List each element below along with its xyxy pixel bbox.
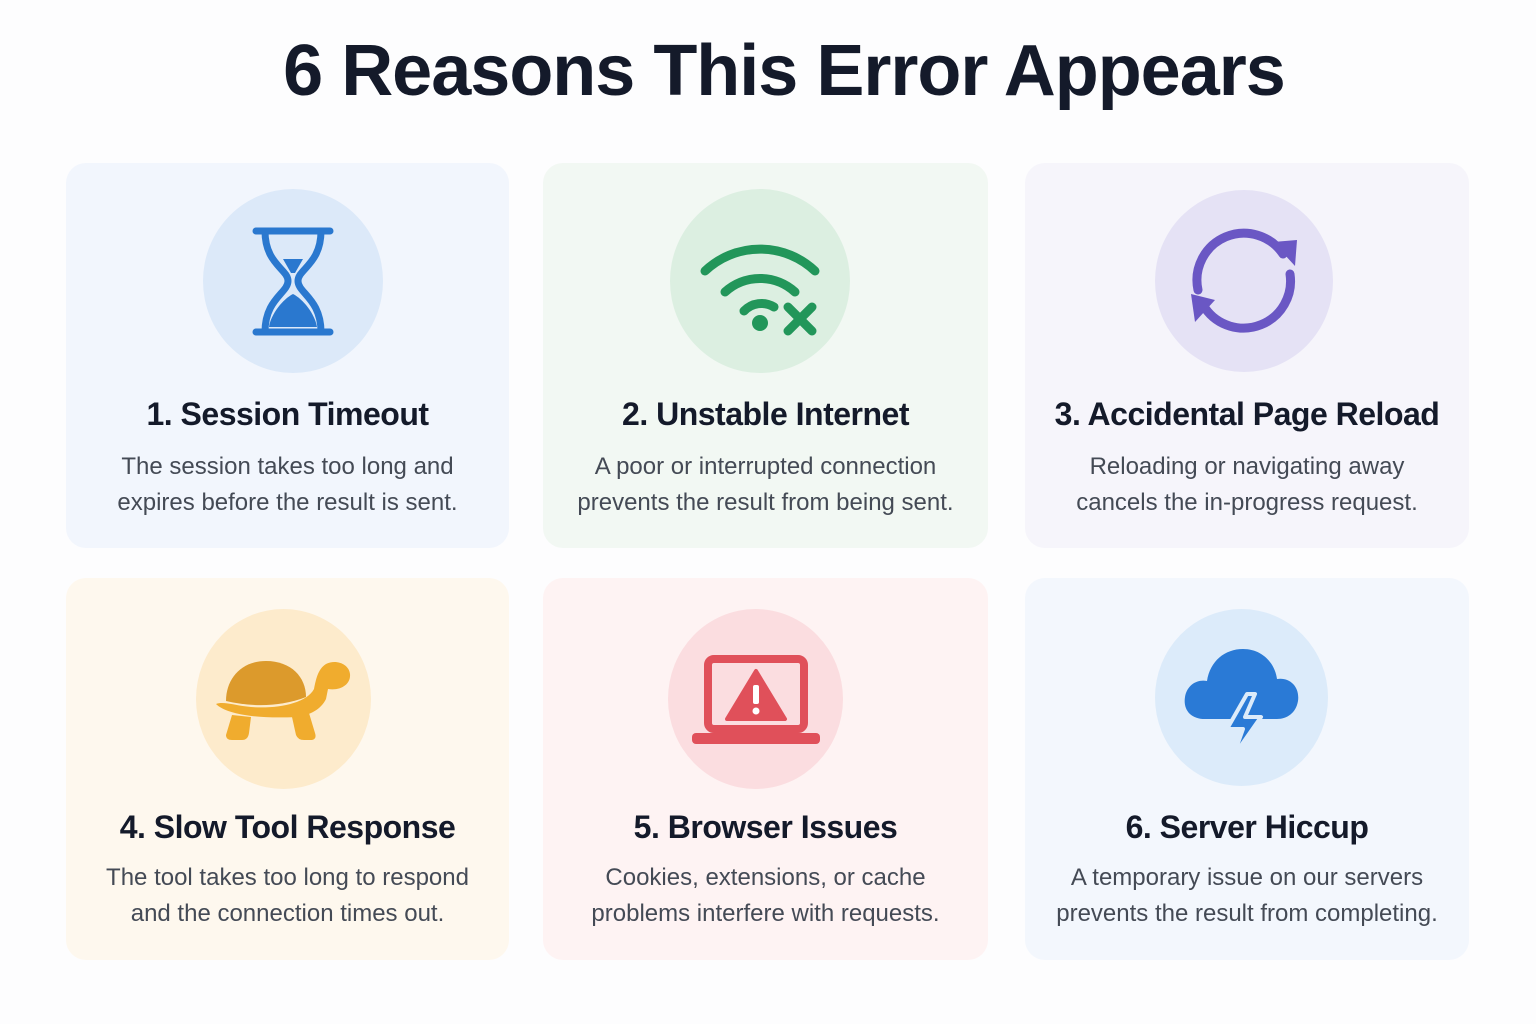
panel: session timeout	[66, 163, 509, 548]
description: A temporary issue on our servers	[1071, 864, 1423, 891]
icon: cloud with lightning	[1155, 609, 1328, 786]
description: prevents the result from being sent.	[577, 489, 954, 516]
description	[106, 864, 469, 927]
icon: hourglass	[203, 189, 383, 373]
description: cancels the in-progress request.	[1076, 489, 1418, 516]
description: The tool takes too long to respond	[106, 864, 469, 891]
description: A poor or interrupted connection	[595, 453, 936, 480]
heading: 5. Browser Issues	[634, 809, 897, 845]
panel: accidental page reload	[1025, 163, 1469, 548]
icon: refresh arrows	[1155, 190, 1333, 372]
panel: browser issues	[543, 578, 988, 960]
panel: server hiccup	[1025, 578, 1469, 960]
description	[1076, 453, 1418, 516]
heading: 3. Accidental Page Reload	[1055, 396, 1439, 432]
description	[117, 453, 458, 516]
heading: 6. Server Hiccup	[1126, 809, 1368, 845]
description: The session takes too long and	[121, 453, 454, 480]
description: problems interfere with requests.	[591, 900, 940, 927]
description: prevents the result from completing.	[1056, 900, 1438, 927]
description	[577, 453, 954, 516]
heading: 4. Slow Tool Response	[120, 809, 455, 845]
panel: unstable internet	[543, 163, 988, 548]
heading: 1. Session Timeout	[146, 396, 429, 432]
description	[1056, 864, 1438, 927]
description	[591, 864, 940, 927]
heading: 2. Unstable Internet	[622, 396, 909, 432]
description: expires before the result is sent.	[117, 489, 458, 516]
description: and the connection times out.	[131, 900, 444, 927]
icon: laptop warning	[668, 609, 843, 789]
description: Cookies, extensions, or cache	[605, 864, 926, 891]
icon: turtle	[196, 609, 371, 789]
panel: slow tool response	[66, 578, 509, 960]
title: 6 Reasons This Error Appears	[283, 31, 1285, 111]
description: Reloading or navigating away	[1090, 453, 1404, 480]
icon: wifi with x	[670, 189, 850, 373]
